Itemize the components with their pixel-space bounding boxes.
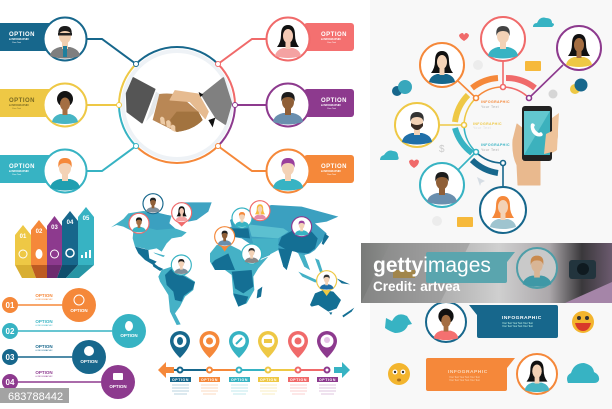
option: blue: OPTION	[9, 32, 35, 38]
americas	[111, 202, 212, 325]
option 01: OPTION	[35, 293, 53, 298]
bubble: blue infographic: Your Text Your Text Your Text	[502, 325, 533, 328]
arc labels	[473, 100, 510, 152]
panel: handshake network	[0, 18, 354, 192]
watermark band	[361, 243, 612, 303]
timeline labels: OPTION	[201, 378, 218, 382]
outer arcs	[455, 78, 535, 173]
icon: handshake	[127, 78, 231, 132]
option: orange: OPTION	[321, 164, 347, 170]
connector lines	[87, 39, 267, 171]
person: teal circle	[420, 163, 464, 207]
person: orange circle	[420, 43, 464, 87]
arc labels: Your Text	[473, 126, 491, 130]
person: red circle	[481, 17, 525, 61]
timeline labels	[170, 377, 338, 394]
faded bubble behind band	[426, 252, 515, 283]
option 02: OPTION	[120, 333, 138, 338]
option: orange: Your Text	[327, 173, 336, 176]
option 04	[2, 365, 135, 399]
person: purple circle	[557, 26, 601, 70]
person: blue ring	[426, 302, 466, 342]
option: blue: & INFOGRAPHIC	[9, 38, 29, 41]
timeline labels: OPTION	[260, 378, 277, 382]
arc labels: INFOGRAPHIC	[481, 143, 510, 147]
icon: worried emoji	[388, 363, 410, 385]
arc labels: Your Text	[481, 105, 499, 109]
panel: speech bubbles	[385, 302, 599, 394]
option 03: & INFOGRAPHIC	[35, 349, 53, 352]
avatar: orange hair man	[50, 158, 80, 190]
person: yellow circle	[395, 103, 439, 147]
arc labels: Your Text	[481, 148, 499, 152]
option 01: 01	[6, 301, 15, 310]
timeline labels: OPTION	[319, 378, 336, 382]
pin red	[288, 331, 308, 358]
timeline	[158, 331, 350, 394]
arc labels: INFOGRAPHIC	[481, 100, 510, 104]
option 01: & INFOGRAPHIC	[35, 298, 53, 301]
bubble: blue infographic	[469, 305, 558, 338]
option 03: OPTION	[35, 344, 53, 349]
bubble: orange infographic	[426, 358, 515, 391]
option: teal: Your Text	[12, 173, 21, 176]
avatar: dark skinned man	[273, 92, 303, 124]
floating icons: clouds, hearts, chat, mail, bulbs: $	[439, 144, 445, 155]
option: orange: & INFOGRAPHIC	[321, 170, 341, 173]
option 02: OPTION	[35, 319, 53, 324]
option: teal: OPTION	[9, 164, 35, 170]
option 04: OPTION	[109, 384, 127, 389]
option: red: Your Text	[327, 41, 336, 44]
arc labels: INFOGRAPHIC	[473, 122, 502, 126]
image id badge: 683788442	[8, 391, 63, 403]
option: teal	[0, 150, 86, 192]
option 04: OPTION	[35, 370, 53, 375]
timeline labels: OPTION	[172, 378, 189, 382]
option 03: OPTION	[80, 359, 98, 364]
option 03	[2, 340, 106, 374]
option 02: 02	[6, 327, 15, 336]
option: blue: Your Text	[12, 41, 21, 44]
pin teal	[229, 331, 249, 358]
panel: phone network	[380, 17, 601, 233]
pin purple	[317, 331, 337, 358]
option: yellow	[0, 84, 86, 126]
right background panel	[370, 0, 612, 409]
person: blue circle	[480, 187, 526, 233]
bubble: orange infographic: INFOGRAPHIC	[448, 369, 488, 375]
icon: laughing emoji	[572, 311, 594, 333]
option: purple	[266, 84, 354, 126]
timeline arrows	[158, 362, 350, 378]
column 01: 01	[20, 234, 27, 240]
option: purple: Your Text	[327, 107, 336, 110]
pin blue	[170, 331, 190, 358]
credit text: Credit: artvea	[373, 279, 461, 294]
inner ring and connectors	[439, 61, 563, 187]
panel: numbered options	[2, 288, 146, 399]
faded avatar behind band	[517, 248, 557, 288]
column 02: 02	[36, 229, 43, 235]
getty images logo text: gettyimages	[373, 254, 491, 277]
option: red	[266, 18, 354, 60]
icon: hand holding phone	[513, 106, 559, 185]
world map	[111, 194, 354, 325]
image id badge	[0, 388, 69, 403]
timeline labels: OPTION	[231, 378, 248, 382]
option: blue	[0, 18, 86, 60]
column 04: 04	[67, 220, 74, 226]
bubble: orange infographic: Your Text Your Text Your Text	[449, 379, 480, 382]
bubble: blue infographic: Your Text Your Text Your Text	[502, 322, 533, 325]
option 03: 03	[6, 353, 15, 362]
column 03: 03	[51, 225, 58, 231]
avatar: purple hair woman	[273, 158, 303, 190]
option: yellow: Your Text	[12, 107, 21, 110]
sheared column bases	[15, 265, 94, 278]
option: orange	[266, 150, 354, 192]
eurasia africa australia	[210, 205, 354, 317]
option 02	[2, 314, 146, 348]
timeline bar	[174, 368, 330, 372]
icon: cloud	[567, 363, 599, 383]
avatar: woman long black hair	[275, 25, 301, 58]
option 04: 04	[6, 378, 15, 387]
icon: bird	[385, 314, 412, 333]
bubble: blue infographic: INFOGRAPHIC	[502, 315, 542, 321]
avatar: man with glasses	[50, 26, 80, 58]
option: purple: & INFOGRAPHIC	[321, 104, 341, 107]
pin orange	[200, 331, 220, 358]
option: purple: OPTION	[321, 98, 347, 104]
pin yellow	[258, 331, 278, 358]
panel: arrow columns	[15, 207, 94, 278]
option: red: OPTION	[321, 32, 347, 38]
faded camera icon	[569, 260, 596, 279]
option 01: OPTION	[70, 308, 88, 313]
option 02: & INFOGRAPHIC	[35, 324, 53, 327]
option: yellow: OPTION	[9, 98, 35, 104]
bubble: orange infographic: Your Text Your Text Your Text	[449, 376, 480, 379]
option 04: & INFOGRAPHIC	[35, 375, 53, 378]
map pins	[129, 194, 337, 296]
avatar: woman short dark hair	[52, 91, 78, 124]
option: red: & INFOGRAPHIC	[321, 38, 341, 41]
option: yellow: & INFOGRAPHIC	[9, 104, 29, 107]
floating icons: clouds, hearts, chat, mail, bulbs	[380, 18, 588, 227]
person: orange ring	[517, 354, 557, 394]
central circle	[116, 47, 238, 163]
column 05: 05	[83, 216, 90, 222]
timeline labels: OPTION	[290, 378, 307, 382]
option: teal: & INFOGRAPHIC	[9, 170, 29, 173]
option 01	[2, 288, 96, 322]
brown smudge under logo	[393, 270, 415, 278]
